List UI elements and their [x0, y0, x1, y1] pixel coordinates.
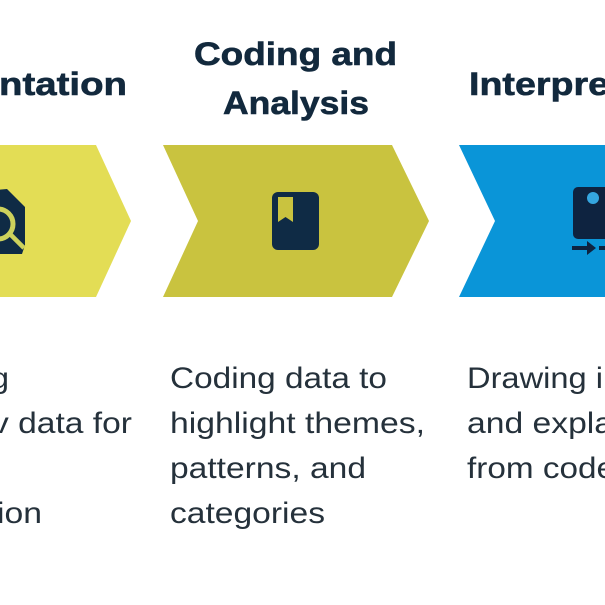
column: Interpretation clipped right: [459, 66, 605, 485]
heading: Coding and Analysis: Coding and: [194, 36, 397, 72]
description: left column: [0, 362, 132, 530]
heading: Coding and Analysis: [194, 36, 397, 121]
icon: interpretation: [572, 187, 605, 255]
description: Coding data: patterns, and: [170, 452, 366, 485]
heading: Coding and Analysis: Analysis: [223, 85, 369, 121]
description: Coding data: [170, 362, 425, 530]
icon: document with magnifier: [0, 189, 25, 254]
column: step 2 clipped left: [0, 66, 132, 530]
chevron: yellow: [0, 145, 131, 297]
heading: ntation: ntation: [0, 66, 127, 102]
chevron: blue: [459, 145, 605, 297]
chevron: olive: [163, 145, 429, 297]
description: Drawing: from code: [467, 452, 605, 485]
description: Coding data: highlight themes,: [170, 407, 425, 440]
description: Drawing: [467, 362, 605, 485]
heading: Interpre: Interpre: [469, 66, 605, 102]
description: Drawing: Drawing i: [467, 362, 603, 395]
icon: book with bookmark: [272, 192, 319, 250]
description: Coding data: categories: [170, 497, 325, 530]
description: Coding data: Coding data to: [170, 362, 387, 395]
description: Drawing: and expla: [467, 407, 605, 440]
column: Coding and Analysis: [163, 36, 429, 530]
